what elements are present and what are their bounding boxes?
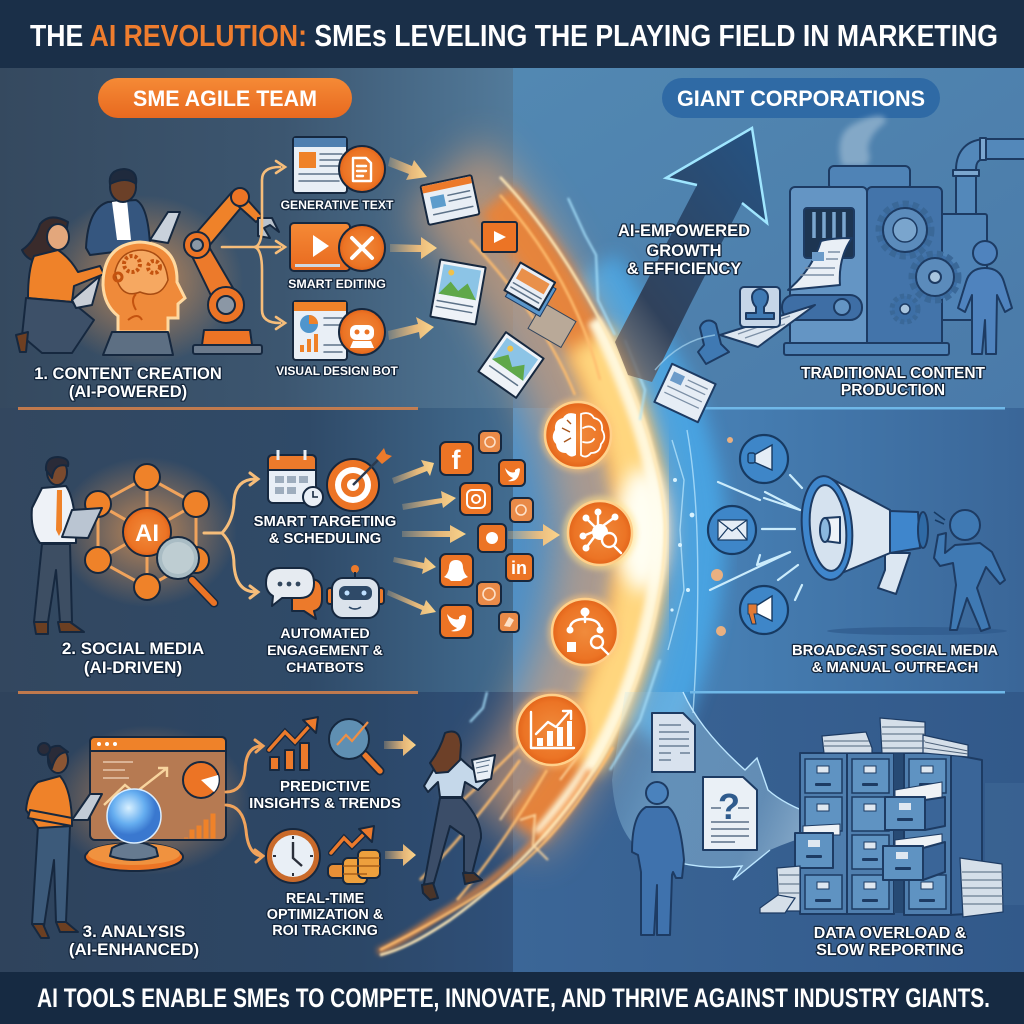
section 2: social media illustration [32, 457, 258, 677]
tool: smart targeting and scheduling: SMART TARGETING [254, 514, 396, 530]
social media icons [440, 431, 533, 638]
gears [879, 204, 958, 322]
open drawers [795, 782, 945, 880]
broadcast social media illustration [708, 435, 1007, 676]
label: 1. CONTENT CREATION [34, 365, 222, 383]
pipe [966, 149, 1024, 214]
heading: SME agile team: SME AGILE TEAM [133, 86, 317, 111]
signal sparks [710, 475, 802, 600]
label: DATA OVERLOAD & [814, 925, 967, 942]
network hexagon [98, 477, 196, 587]
tool: smart targeting and scheduling: & SCHEDULING [269, 531, 381, 547]
label [62, 639, 204, 677]
notification icons [708, 435, 788, 636]
tool: predictive insights and trends [249, 717, 401, 812]
branching arrows [204, 473, 258, 598]
label: & MANUAL OUTREACH [812, 660, 978, 676]
question document: ? [718, 786, 740, 827]
traditional content production machine [654, 116, 1024, 422]
stamp tile [740, 287, 780, 327]
tool: generative text [281, 137, 394, 212]
branching arrows [226, 740, 263, 862]
document [654, 364, 716, 422]
growth label: AI-EMPOWERED [618, 222, 750, 240]
flat paper [720, 305, 815, 347]
arrows toward social icons [387, 460, 560, 615]
glowing brain head [103, 242, 185, 355]
stamp [698, 320, 729, 364]
label: BROADCAST SOCIAL MEDIA [792, 643, 998, 659]
robot arm [184, 188, 279, 354]
label [792, 643, 998, 676]
section 3: analysis illustration [26, 725, 263, 959]
label [814, 925, 967, 959]
woman kneeling [16, 217, 104, 353]
tool: smart targeting and scheduling [254, 448, 396, 547]
swoosh arrow [612, 692, 868, 880]
arrows toward energy arc, row 1 [388, 157, 437, 340]
filing cabinets [800, 753, 1024, 915]
branching arrows [222, 161, 285, 329]
pump box [940, 214, 987, 320]
tool: generative text: GENERATIVE TEXT [281, 198, 394, 212]
woman with laptop [26, 743, 102, 938]
network nodes [85, 464, 209, 600]
AI badge: growth chart [513, 691, 591, 769]
running woman with tablet [422, 732, 495, 900]
panel: right background corporations side [513, 68, 1024, 972]
label: (AI-POWERED) [69, 383, 187, 401]
panel: left background SME side [0, 68, 513, 972]
tool: smart editing [288, 223, 386, 291]
tool: real-time optimization and ROI tracking [266, 826, 383, 939]
tool: predictive insights and trends: PREDICTIVE [280, 778, 370, 795]
AI badge: team search [548, 595, 622, 669]
tool: real-time optimization and ROI tracking: ROI TRACKING [272, 923, 378, 939]
growth arrow [615, 128, 767, 382]
man with tablet [86, 169, 180, 255]
label [69, 922, 199, 959]
growth label [618, 222, 750, 278]
floating content cards [420, 175, 576, 398]
row divider lines [18, 407, 1005, 694]
tool: visual design bot: VISUAL DESIGN BOT [276, 364, 399, 378]
energy arc dividing the two sides [378, 177, 698, 955]
tool: automated engagement and chatbots [266, 565, 384, 676]
paper stacks [760, 718, 1003, 917]
label [34, 365, 222, 401]
tool: predictive insights and trends: INSIGHTS & TRENDS [249, 795, 401, 812]
label: TRADITIONAL CONTENT [801, 365, 986, 382]
man with tablet [32, 457, 102, 634]
tool: real-time optimization and ROI tracking: REAL-TIME [286, 891, 365, 907]
tool: real-time optimization and ROI tracking: OPTIMIZATION & [267, 907, 383, 923]
AI badge: network search [563, 496, 637, 570]
heading: giant corporations [662, 78, 940, 118]
person [958, 268, 1012, 354]
machine body [829, 166, 910, 190]
label [801, 365, 986, 399]
label: 3. ANALYSIS [83, 922, 185, 941]
megaphone [798, 474, 928, 594]
section 1: content creation illustration [16, 161, 285, 401]
steam [840, 116, 886, 166]
growth label: GROWTH [646, 242, 722, 260]
tool: automated engagement and chatbots: ENGAGEMENT & [267, 643, 383, 659]
label: (AI-ENHANCED) [69, 940, 199, 959]
AI badge: brain [541, 398, 615, 472]
tool: automated engagement and chatbots: AUTOMATED [280, 626, 370, 642]
arrows toward running woman [384, 734, 416, 866]
tool: visual design bot [276, 301, 399, 378]
title bar [0, 0, 1024, 68]
person shouting [827, 510, 1007, 635]
label: PRODUCTION [841, 382, 945, 399]
dashboard window [90, 737, 226, 840]
person from behind [632, 807, 684, 935]
magnifier [157, 537, 214, 603]
network nodes: AI [135, 520, 159, 547]
conveyor [782, 295, 862, 320]
label: SLOW REPORTING [816, 942, 964, 959]
question document [703, 777, 757, 850]
label: (AI-DRIVEN) [84, 658, 182, 677]
tool: smart editing: SMART EDITING [288, 277, 386, 291]
data overload illustration [612, 692, 1024, 959]
tool: automated engagement and chatbots: CHATBOTS [286, 660, 364, 676]
footer banner [0, 972, 1024, 1024]
social media icons: in [511, 558, 527, 578]
growth label: & EFFICIENCY [627, 260, 741, 278]
document [652, 713, 695, 772]
social media icons: f [452, 445, 462, 475]
printed paper [788, 238, 852, 290]
crystal ball [85, 789, 183, 871]
label: 2. SOCIAL MEDIA [62, 639, 204, 658]
swoosh line [655, 335, 715, 370]
heading: SME agile team [98, 78, 352, 118]
heading: giant corporations: GIANT CORPORATIONS [677, 86, 925, 111]
